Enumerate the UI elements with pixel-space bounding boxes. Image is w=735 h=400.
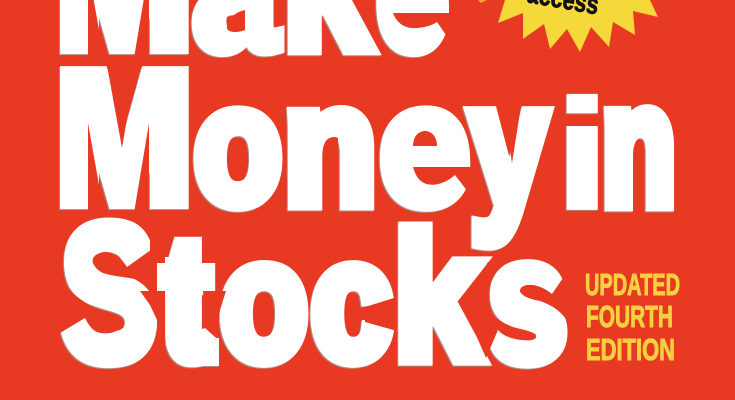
title word: Stocks: t (164, 207, 208, 390)
title word: Money: y (471, 49, 547, 244)
edition label: EDITION (586, 332, 675, 367)
title word: Stocks: o (220, 206, 308, 395)
title word: Money (59, 40, 547, 244)
title word: Make (59, 0, 448, 86)
title word: in: n (602, 51, 675, 239)
edition label: UPDATED (585, 267, 680, 302)
title word: Money: e (381, 53, 469, 239)
title word: Money: M (59, 40, 190, 237)
title word: Stocks: S (61, 187, 157, 399)
letterform counters (50, 0, 644, 367)
title word: in: i (556, 69, 609, 242)
title word: Stocks: c (311, 206, 392, 395)
edition label: FOURTH (586, 299, 673, 334)
title word: in (556, 51, 675, 242)
starburst badge (478, 0, 658, 52)
title word: Money: o (194, 51, 282, 238)
title word: Stocks: s (489, 206, 566, 395)
title word: Stocks (61, 187, 566, 399)
title word: Stocks: k (394, 198, 480, 396)
edition label (585, 267, 680, 367)
title word: Money: n (284, 51, 377, 239)
